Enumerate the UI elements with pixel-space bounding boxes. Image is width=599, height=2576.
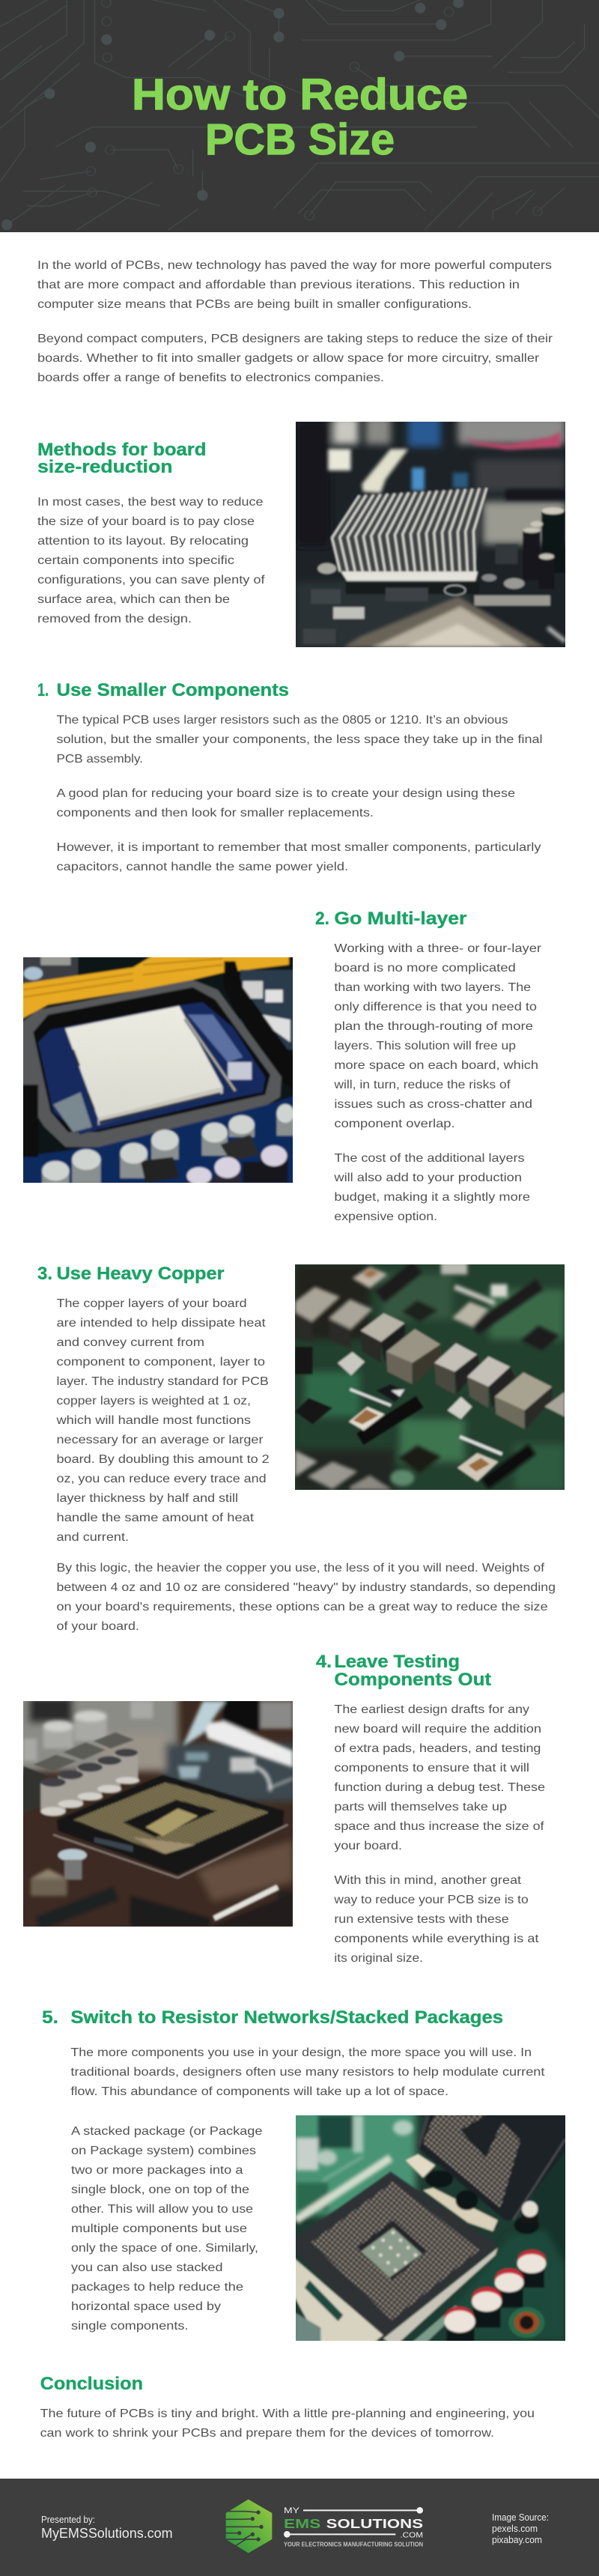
heading: 3. use heavy copper: 3. bbox=[37, 1264, 52, 1284]
section 5 text: other. This will allow you to use bbox=[71, 2203, 253, 2216]
section 3 text: board. By doubling this amount to 2 bbox=[57, 1453, 270, 1466]
section 4 text: The earliest design drafts for any bbox=[334, 1703, 529, 1716]
methods text: In most cases, the best way to reduce bbox=[37, 496, 264, 509]
section 4 text: your board. bbox=[334, 1840, 402, 1852]
section 2 text: layers. This solution will free up bbox=[334, 1040, 516, 1052]
section 3 text: By this logic, the heavier the copper you use, the less of it you will need. Weights of bbox=[57, 1562, 545, 1575]
title: How to Reduce bbox=[132, 70, 468, 119]
intro text bbox=[37, 259, 553, 384]
section 2 text: than working with two layers. The bbox=[334, 981, 531, 994]
section 4 text: new board will require the addition bbox=[334, 1723, 541, 1736]
presented by bbox=[41, 2514, 173, 2541]
section 1 text bbox=[57, 714, 542, 873]
section 1 text: PCB assembly. bbox=[57, 753, 143, 766]
section 3 text: are intended to help dissipate heat bbox=[57, 1317, 266, 1330]
photo: green circuit board with components bbox=[295, 1264, 565, 1490]
methods text: surface area, which can then be bbox=[37, 593, 230, 606]
section 2 text: will also add to your production bbox=[333, 1172, 522, 1184]
section 4 text: its original size. bbox=[334, 1952, 423, 1965]
section 5 text: single components. bbox=[71, 2320, 189, 2333]
photo: white CPU socket on blue board bbox=[23, 957, 293, 1183]
section 3 text bbox=[55, 1297, 556, 1633]
heading: 4. leave testing components out: 4. bbox=[316, 1652, 332, 1672]
section 2 text: The cost of the additional layers bbox=[334, 1152, 524, 1165]
section 4 text: parts will themselves take up bbox=[334, 1801, 507, 1813]
logo wordmark: .COM bbox=[400, 2531, 423, 2539]
methods text: attention to its layout. By relocating bbox=[37, 535, 249, 548]
image source bbox=[492, 2512, 549, 2545]
section 5 text bbox=[70, 2046, 545, 2333]
logo wordmark: YOUR ELECTRONICS MANUFACTURING SOLUTION bbox=[284, 2541, 423, 2548]
logo wordmark: SOLUTIONS bbox=[326, 2516, 423, 2531]
section 4 text: components to ensure that it will bbox=[334, 1762, 529, 1775]
methods text: the size of your board is to pay close bbox=[37, 515, 255, 528]
section 5 text: two or more packages into a bbox=[71, 2164, 243, 2177]
section 5 text: multiple components but use bbox=[71, 2222, 247, 2235]
photo: socket with open lid and capacitors bbox=[296, 2115, 565, 2341]
section 2 text: budget, making it a slightly more bbox=[334, 1191, 530, 1204]
intro text: boards offer a range of benefits to electronics companies. bbox=[37, 372, 384, 384]
section 2 text: only difference is that you need to bbox=[334, 1001, 537, 1013]
heading: 1. use smaller components: Use Smaller Components bbox=[57, 680, 289, 700]
section 3 text: layer. The industry standard for PCB bbox=[57, 1375, 269, 1388]
footer panel bbox=[0, 2479, 599, 2576]
section 2 text: more space on each board, which bbox=[334, 1059, 538, 1072]
logo hexagon icon bbox=[226, 2500, 272, 2553]
image source: pexels.com bbox=[492, 2523, 538, 2534]
section 3 text: between 4 oz and 10 oz are considered "heavy" by industry standards, so depending bbox=[57, 1581, 556, 1594]
presented by: MyEMSSolutions.com bbox=[41, 2526, 173, 2541]
heading: 4. leave testing components out: Leave Testing bbox=[334, 1652, 460, 1672]
section 1 text: components and then look for smaller replacements. bbox=[57, 807, 374, 819]
header panel bbox=[0, 0, 599, 232]
logo wordmark: MY bbox=[284, 2506, 300, 2515]
heading: 4. leave testing components out bbox=[316, 1652, 491, 1690]
section 3 text: on your board's requirements, these options can be a great way to reduce the size bbox=[57, 1601, 548, 1613]
logo: my ems solutions bbox=[226, 2500, 423, 2553]
presented by: Presented by: bbox=[41, 2514, 95, 2525]
section 5 text: only the space of one. Similarly, bbox=[71, 2242, 258, 2255]
heading: methods for board size-reduction bbox=[37, 440, 207, 477]
section 5 text: you can also use stacked bbox=[71, 2261, 223, 2274]
section 3 text: copper layers is weighted at 1 oz, bbox=[57, 1395, 251, 1407]
heading: conclusion: Conclusion bbox=[40, 2374, 143, 2394]
section 3 text: oz, you can reduce every trace and bbox=[57, 1473, 267, 1485]
intro text: boards. Whether to fit into smaller gadgets or allow space for more circuitry, smaller bbox=[37, 352, 540, 365]
heading: 4. leave testing components out: Components Out bbox=[334, 1670, 491, 1690]
methods text: certain components into specific bbox=[37, 554, 234, 567]
section 5 text: horizontal space used by bbox=[71, 2300, 221, 2313]
section 5 text: flow. This abundance of components will take up a lot of space. bbox=[70, 2085, 449, 2098]
image source: pixabay.com bbox=[492, 2534, 542, 2545]
methods text: configurations, you can save plenty of bbox=[37, 574, 265, 587]
section 3 text: of your board. bbox=[57, 1620, 139, 1633]
methods text bbox=[37, 496, 265, 625]
section 4 text: run extensive tests with these bbox=[334, 1913, 509, 1926]
section 3 text: necessary for an average or larger bbox=[57, 1434, 264, 1446]
section 1 text: solution, but the smaller your components, the less space they take up in the final bbox=[57, 733, 542, 746]
image source: Image Source: bbox=[492, 2512, 549, 2523]
section 3 text: component to component, layer to bbox=[57, 1356, 265, 1369]
circuit trace background bbox=[0, 0, 599, 230]
conclusion text: The future of PCBs is tiny and bright. With a little pre-planning and engineering, you bbox=[40, 2407, 535, 2420]
section 1 text: However, it is important to remember that most smaller components, particularly bbox=[57, 841, 541, 854]
intro text: computer size means that PCBs are being built in smaller configurations. bbox=[37, 298, 472, 311]
title bbox=[132, 70, 468, 164]
section 4 text bbox=[333, 1703, 545, 1965]
section 5 text: packages to help reduce the bbox=[71, 2281, 243, 2294]
conclusion text bbox=[40, 2407, 535, 2440]
section 5 text: The more components you use in your design, the more space you will use. In bbox=[70, 2046, 532, 2059]
heading: 1. use smaller components: 1. bbox=[37, 680, 49, 700]
heading: 2. go multi-layer: 2. bbox=[315, 909, 329, 929]
section 4 text: way to reduce your PCB size is to bbox=[333, 1894, 529, 1906]
logo wordmark: EMS bbox=[284, 2516, 320, 2531]
section 1 text: capacitors, cannot handle the same power yield. bbox=[57, 861, 348, 873]
section 4 text: With this in mind, another great bbox=[334, 1874, 522, 1887]
section 1 text: The typical PCB uses larger resistors such as the 0805 or 1210. It’s an obvious bbox=[57, 714, 508, 727]
photo: open CPU socket on brown board bbox=[23, 1701, 293, 1927]
methods text: removed from the design. bbox=[37, 613, 192, 625]
section 2 text: board is no more complicated bbox=[334, 962, 516, 975]
section 4 text: function during a debug test. These bbox=[334, 1781, 545, 1794]
section 2 text bbox=[333, 942, 542, 1223]
section 2 text: expensive option. bbox=[334, 1210, 437, 1223]
section 5 text: single block, one on top of the bbox=[71, 2183, 249, 2196]
section 3 text: and convey current from bbox=[57, 1336, 204, 1349]
section 2 text: issues such as cross-chatter and bbox=[334, 1098, 532, 1111]
section 4 text: space and thus increase the size of bbox=[334, 1820, 544, 1833]
section 3 text: and current. bbox=[57, 1531, 129, 1544]
section 3 text: layer thickness by half and still bbox=[57, 1492, 238, 1505]
heading: 5. switch to resistor networks/stacked packages: 5. bbox=[42, 2007, 58, 2028]
section 4 text: components while everything is at bbox=[334, 1933, 539, 1945]
heading: methods for board size-reduction: size-reduction bbox=[37, 457, 172, 477]
section 2 text: plan the through-routing of more bbox=[334, 1020, 533, 1033]
section 2 text: Working with a three- or four-layer bbox=[334, 942, 542, 955]
intro text: Beyond compact computers, PCB designers are taking steps to reduce the size of their bbox=[37, 333, 553, 345]
logo wordmark bbox=[284, 2506, 423, 2548]
section 4 text: of extra pads, headers, and testing bbox=[334, 1742, 541, 1755]
heading: 5. switch to resistor networks/stacked packages: Switch to Resistor Networks/Stacked Packages bbox=[70, 2007, 503, 2028]
photo: heat sink on motherboard bbox=[296, 422, 565, 647]
section 5 text: traditional boards, designers often use many resistors to help modulate current bbox=[70, 2066, 545, 2079]
conclusion text: can work to shrink your PCBs and prepare them for the devices of tomorrow. bbox=[40, 2427, 494, 2440]
section 2 text: component overlap. bbox=[334, 1118, 455, 1130]
heading: 3. use heavy copper: Use Heavy Copper bbox=[57, 1264, 225, 1284]
heading: 2. go multi-layer: Go Multi-layer bbox=[334, 909, 466, 929]
section 2 text: will, in turn, reduce the risks of bbox=[333, 1079, 511, 1091]
section 3 text: The copper layers of your board bbox=[57, 1297, 247, 1310]
section 5 text: on Package system) combines bbox=[71, 2145, 256, 2157]
title: PCB Size bbox=[205, 115, 395, 164]
section 5 text: A stacked package (or Package bbox=[71, 2125, 263, 2138]
section 1 text: A good plan for reducing your board size is to create your design using these bbox=[57, 787, 515, 800]
section 3 text: which will handle most functions bbox=[55, 1414, 251, 1427]
section 3 text: handle the same amount of heat bbox=[57, 1512, 255, 1524]
intro text: In the world of PCBs, new technology has paved the way for more powerful computers bbox=[37, 259, 552, 272]
heading: methods for board size-reduction: Methods for board bbox=[37, 440, 207, 460]
intro text: that are more compact and affordable than previous iterations. This reduction in bbox=[37, 279, 520, 291]
